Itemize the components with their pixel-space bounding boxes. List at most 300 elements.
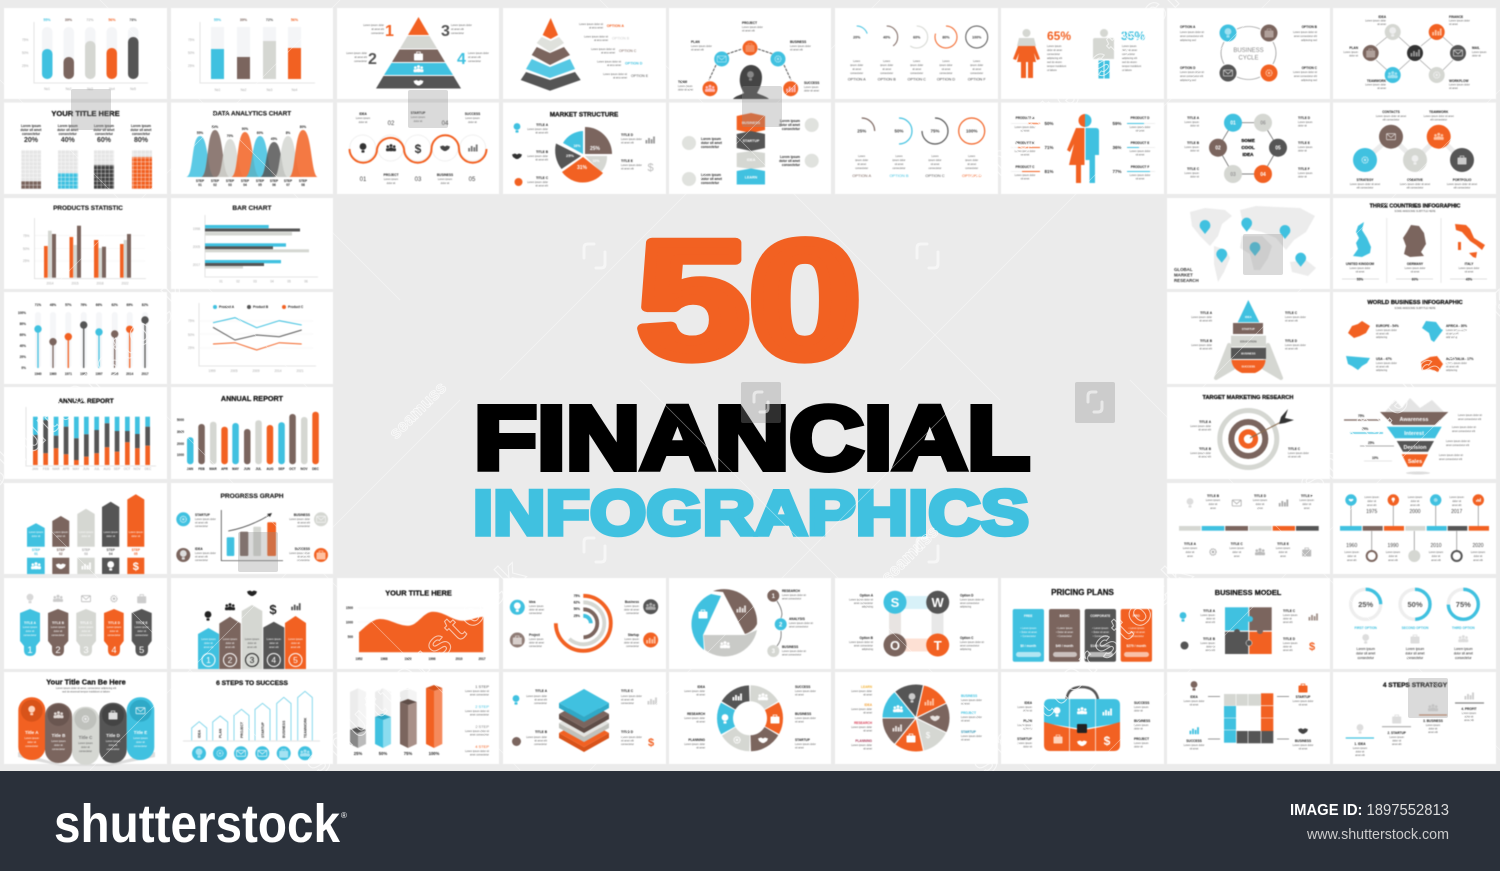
panel: data analytics bell chart: 07 — [286, 183, 290, 187]
panel: flat pyramid: consectetur — [468, 60, 481, 63]
panel: world business — [1333, 292, 1496, 384]
panel: infinity loop circles: Lorem ipsum dolor — [1449, 20, 1470, 22]
panel: 3D pyramid with options: OPTION E — [631, 74, 649, 78]
panel: six steps to success: IDEA — [198, 729, 202, 738]
panel: column cards: consectetur — [107, 748, 120, 751]
panel: year timeline: dolor sit — [1411, 500, 1420, 503]
panel: business model puzzle: amet elit — [1283, 621, 1293, 624]
panel: radial progress options: OPTION A — [852, 173, 871, 178]
panel: lollipop chart — [4, 292, 167, 384]
footer registered mark: ® — [341, 811, 347, 820]
panel: swirl three segment cycle: 3 — [772, 649, 776, 655]
panel: gender split figure: PRODUCT F — [1131, 165, 1149, 169]
panel: rocket: sit amet elit — [1199, 320, 1212, 322]
panel: 3D pyramid with options: OPTION D — [625, 62, 643, 66]
panel: gender split figure: PRODUCT C — [1016, 165, 1035, 169]
panel: swirl three segment cycle: Lorem ipsum dolor sit — [782, 594, 806, 597]
panel: progress graph — [171, 483, 333, 574]
panel: horizontal timeline with icons: Lorem ipsum — [1229, 547, 1244, 550]
panel: numbered tags: dolor sit — [82, 630, 91, 633]
panel: numbered arrow columns: 3 — [250, 655, 255, 665]
panel: ring percentages: 25% — [1358, 600, 1374, 609]
panel: products statistic: 2014 — [46, 282, 54, 286]
panel: 3D pyramid with options: at arcu amet — [607, 64, 621, 67]
panel: 3D pyramid with options: Lorem ipsum dolor sit — [591, 48, 615, 51]
panel: segmented ring: sit amet — [795, 746, 804, 750]
panel: briefcase: dolor sit — [1023, 746, 1032, 748]
panel: column cards: Your Title Can Be Here — [46, 678, 126, 686]
panel: linked icon circles: PORTFOLIO — [1453, 178, 1472, 182]
panel: hexagon idea cycle: TITLE A — [1187, 116, 1200, 120]
panel: flat pyramid: consectetur — [371, 32, 384, 35]
panel: market structure pie: TITLE A — [536, 123, 549, 127]
panel: year timeline: dolor sit — [1474, 555, 1483, 558]
panel: data analytics bell chart: 08 — [301, 183, 305, 187]
panel: pricing plans: • Dolor sit amet — [1092, 631, 1109, 634]
panel: four steps strategy — [1333, 672, 1496, 764]
panel: horizontal timeline with icons: TITLE D — [1254, 494, 1267, 498]
panel: progress graph: IDEA — [195, 547, 203, 551]
panel: 3D column chart: Lorem ipsum dolor sit — [465, 730, 489, 733]
panel: segmented ring — [669, 672, 831, 764]
panel: head with idea arc: Lorem ipsum dolor — [790, 45, 811, 48]
panel: business cycle: Lorem ipsum dolor sit — [1180, 71, 1204, 74]
panel: linked icon circles: Lorem ipsum dolor sit amet — [1376, 115, 1406, 118]
panel: flat pyramid: Lorem ipsum dolor — [363, 24, 384, 27]
panel: six steps to success: PLAN — [218, 728, 222, 738]
panel: puzzle ring — [1167, 672, 1330, 764]
panel: annual report rounded bars: SEP — [278, 467, 286, 471]
panel: stacked layers: consectetur — [621, 702, 634, 705]
panel: ring percentages: SECOND OPTION — [1402, 626, 1429, 630]
panel: progress graph: Lorem ipsum dolor — [289, 552, 310, 555]
panel: year timeline: amet elit — [1347, 559, 1357, 562]
panel: column cards: Title D — [106, 733, 121, 738]
panel: swirl three segment cycle: amet consectetur — [782, 598, 801, 600]
panel: progress graph: STARTUP — [195, 513, 211, 517]
panel: infinity loop circles: Lorem ipsum dolor — [1365, 84, 1386, 86]
panel: wave timeline: BUSINESS — [437, 173, 453, 177]
panel: hexagon idea cycle: 04 — [1260, 172, 1266, 178]
panel: briefcase: dolor sit — [1023, 710, 1032, 712]
panel: horizontal timeline with icons: TITLE C — [1231, 542, 1243, 546]
panel: 3D pyramid with options: OPTION C — [619, 49, 637, 53]
panel: pricing plans: • Consectetur — [1129, 635, 1144, 638]
panel: radial bar chart: Lorem ipsum — [625, 605, 639, 608]
panel: waffle percent chart — [4, 102, 167, 194]
panel: annual report rounded bars: MAY — [232, 467, 240, 471]
panel: business model puzzle: $ — [1309, 641, 1315, 653]
panel: lollipop chart: 1960 — [49, 372, 57, 376]
panel: business cycle: amet consectetur elit — [1294, 75, 1317, 78]
panel: radial progress options: 100% — [966, 128, 977, 134]
panel: segmented ring: Lorem ipsum dolor — [795, 717, 816, 720]
panel: ring percentages: THIRD OPTION — [1452, 626, 1475, 630]
panel: target marketing — [1167, 387, 1330, 479]
panel: column cards: dolor sit — [81, 746, 90, 749]
panel: world business: adipiscing — [1376, 369, 1388, 372]
panel: infinity loop circles: WORKFLOW — [1449, 79, 1468, 83]
panel: segmented ring: BUSINESS — [795, 712, 811, 716]
panel: sales funnel: 75% — [1358, 414, 1365, 418]
panel: business cycle: amet consectetur elit — [1294, 35, 1317, 38]
panel: products statistic: 75% — [23, 234, 30, 238]
panel: progress graph: consectetur — [297, 559, 310, 562]
panel: horizontal timeline with icons: amet — [1234, 555, 1240, 558]
panel: linked icon circles: CONTACTS — [1382, 110, 1400, 114]
panel: segmented ring: sit amet — [696, 694, 705, 696]
panel: segmented ring: Lorem ipsum dolor — [795, 743, 816, 746]
panel: lollipop chart: 69% — [127, 303, 133, 307]
panel: line chart: 2021 — [296, 369, 304, 373]
panel: annual report stacked bars: JUN — [83, 467, 90, 471]
panel: progress arrows: ipsum dolor — [970, 64, 983, 67]
panel: numbered arrow columns: 1 — [206, 655, 211, 665]
panel: seven segment pie: sit amet — [863, 694, 872, 696]
panel: market structure pie: TITLE C — [536, 176, 549, 180]
panel: world business: sit amet elit — [1376, 366, 1389, 368]
panel: puzzle ring: Lorem ipsum dolor — [1184, 744, 1205, 747]
panel: progress arrows: Lorem — [883, 60, 890, 63]
panel: square bar chart: 25% — [188, 64, 195, 68]
panel: briefcase: PROJECT — [1134, 737, 1149, 741]
panel: column cards: Title C — [79, 735, 93, 740]
panel: wave timeline: 05 — [469, 177, 476, 183]
panel: horizontal timeline with icons: amet — [1280, 555, 1286, 558]
panel: world business: Lorem ipsum dolor — [1446, 362, 1467, 365]
panel: square bar chart: 55% — [214, 18, 222, 22]
panel: world business: Lorem ipsum dolor — [1376, 362, 1397, 365]
panel: pricing plans: $279 / month — [1127, 644, 1146, 648]
panel: briefcase: dolor sit — [1134, 746, 1143, 748]
panel: flat pyramid: 1 — [385, 23, 394, 40]
panel: stacked layers — [503, 672, 666, 764]
panel: hexagon idea cycle: dolor sit — [1298, 150, 1307, 152]
panel: radial progress options: consectetur — [855, 167, 868, 170]
panel: step arrows with icons: 01 — [34, 552, 38, 556]
panel: progress graph: consectetur — [195, 525, 208, 528]
panel: radial progress options: sit amet — [895, 163, 904, 166]
panel: infinity loop circles: dolor sit — [1472, 54, 1481, 58]
panel: lollipop chart: 2017 — [141, 372, 149, 376]
panel: products statistic: PRODUCTS STATISTIC — [53, 205, 123, 212]
panel: learning chevron stack: Lorem ipsum — [701, 137, 721, 141]
panel: waffle percent chart: 60% — [97, 137, 112, 144]
panel: puzzle ring: Lorem ipsum dolor — [1184, 700, 1205, 703]
panel: products statistic: 2015 — [71, 282, 79, 286]
panel: data analytics bell chart: STEP — [256, 179, 265, 183]
panel: gender split figure: 77% — [1112, 169, 1122, 174]
panel: radial bar chart: Idea — [529, 600, 536, 604]
panel: business cycle: OPTION A — [1180, 25, 1196, 29]
panel: data analytics bell chart: 01 — [198, 183, 202, 187]
panel: stacked layers: consectetur — [621, 743, 634, 746]
panel: four steps strategy: 2. STARTUP — [1388, 731, 1407, 735]
panel: market structure pie: Lorem ipsum dolor — [621, 164, 642, 167]
panel: rounded bar chart — [4, 8, 167, 99]
panel: annual report rounded bars: APR — [221, 467, 229, 471]
panel: flat pyramid: Lorem ipsum dolor — [451, 24, 472, 27]
panel: progress arrows: ipsum dolor — [850, 64, 863, 67]
panel: area chart: 2017 — [478, 657, 486, 661]
panel: progress arrows: sit amet — [882, 68, 891, 71]
panel: numbered arrow columns: dolor sit — [269, 642, 278, 645]
panel: square bar chart: 72% — [266, 18, 274, 22]
panel: radial bar chart: consectetur — [626, 612, 639, 615]
panel: six steps to success: PROJECT — [240, 721, 244, 738]
panel: waffle percent chart: consectetur — [59, 132, 77, 136]
panel: radial bar chart: Lorem ipsum — [625, 638, 639, 641]
panel: gender split figure: sit amet — [1136, 178, 1145, 180]
panel: business cycle: OPTION B — [1302, 25, 1318, 29]
panel: progress graph: sit amet elit — [297, 556, 310, 558]
panel: lollipop chart: 1986 — [80, 372, 87, 376]
panel: SWOT: Lorem ipsum dolor sit — [960, 641, 984, 644]
panel: radial bar chart: consectetur — [529, 612, 542, 615]
panel: radial bar chart: dolor sit amet — [529, 642, 544, 644]
panel: numbered arrow columns: Lorem ipsum — [267, 638, 281, 641]
panel: world business: AUSTRALIA - 17% — [1446, 357, 1474, 361]
panel: radial progress options: Lorem — [895, 155, 903, 158]
panel: column cards: consectetur — [79, 750, 92, 753]
panel: waffle percent chart: 40% — [61, 137, 75, 144]
panel: lollipop chart: 20% — [20, 355, 26, 359]
panel: data analytics bell chart: 70% — [227, 134, 233, 138]
panel: horizontal timeline with icons: TITLE F — [1301, 494, 1313, 498]
panel: progress graph: PROGRESS GRAPH — [220, 493, 284, 500]
panel: business cycle: CYCLE — [1238, 56, 1259, 62]
panel: numbered tags: Lorem ipsum — [23, 626, 37, 629]
panel: annual report stacked bars: DEC — [145, 467, 152, 471]
panel: year timeline: Lorem ipsum — [1386, 551, 1400, 554]
panel: gender split figure: Lorem ipsum dolor — [1130, 174, 1151, 177]
panel: numbered tags: TITLE E — [136, 621, 148, 625]
panel: numbered arrow columns: Lorem ipsum — [245, 638, 259, 641]
panel: stacked layers: Lorem ipsum dolor — [526, 736, 547, 739]
panel: step arrows with icons: STEP — [82, 548, 91, 552]
panel: horizontal bar chart: 01 — [219, 280, 223, 284]
panel: business cycle: OPTION C — [1302, 66, 1318, 70]
panel: market structure pie: 31% — [577, 165, 588, 171]
panel: data analytics bell chart: 04 — [243, 183, 247, 187]
panel: three countries: Lorem ipsum dolor — [1459, 267, 1480, 270]
panel: briefcase: $ — [1104, 734, 1111, 748]
panel: 3D pyramid with options: at arcu amet — [601, 52, 615, 54]
panel: hexagon idea cycle: TITLE C — [1187, 167, 1200, 171]
panel: gender split figure: 59% — [1112, 121, 1122, 126]
panel: hexagon idea cycle: 03 — [1230, 172, 1236, 178]
panel: ring percentages: dolor sit amet — [1405, 652, 1425, 656]
panel: step arrows with icons: STEP — [57, 548, 66, 552]
panel: stacked layers: Lorem ipsum dolor — [621, 736, 642, 739]
panel: column cards: Title B — [52, 733, 66, 738]
panel: data analytics bell chart: 06 — [272, 183, 276, 187]
panel: three countries: sit amet — [1411, 270, 1420, 274]
panel: flat pyramid: sit amet elit — [468, 56, 481, 59]
panel: swirl three segment cycle: amet consectetur — [789, 626, 808, 628]
panel: business cycle: adipiscing sed — [1180, 79, 1196, 82]
panel: world business: sit amet elit — [1446, 366, 1459, 368]
panel: stacked layers: Lorem ipsum dolor — [621, 695, 642, 698]
panel: 3D pyramid with options: Lorem ipsum dolor sit — [603, 73, 627, 76]
panel: radial progress options: consectetur — [929, 167, 942, 170]
panel: gender split figure — [1001, 102, 1164, 194]
panel: learning chevron stack — [669, 102, 831, 194]
panel: line chart: 1999 — [208, 369, 216, 373]
panel: annual report rounded bars: 5000 — [177, 418, 184, 422]
panel: world business: SOME AWESOME SUBTITLE HERE — [1394, 307, 1436, 310]
panel: numbered tags: 3 — [83, 645, 89, 656]
panel: radial bar chart: dolor sit amet — [529, 608, 544, 612]
panel: SWOT: amet consectetur — [854, 602, 873, 605]
panel: hexagon idea cycle: 01 — [1230, 120, 1236, 126]
panel: horizontal bar chart: 06 — [304, 280, 308, 284]
panel: radial bar chart: dolor sit amet — [624, 608, 639, 612]
panel: progress graph: consectetur — [195, 559, 208, 562]
panel: market structure pie: MARKET STRUCTURE — [550, 112, 619, 118]
panel: SWOT — [835, 578, 998, 669]
panel: gender split figure: 36% — [1112, 145, 1122, 150]
panel: annual report stacked bars: SEP — [114, 467, 120, 471]
panel: progress graph: SUCCESS — [295, 547, 310, 551]
panel: column cards: consectetur — [52, 748, 65, 751]
panel: puzzle ring: sit amet — [1190, 748, 1199, 750]
panel: market structure pie: 10% — [592, 159, 600, 163]
panel: radial progress options: 50% — [894, 128, 904, 134]
panel: pricing plans: • Dolor sit amet — [1128, 631, 1145, 634]
panel: data analytics bell chart: 8% — [286, 131, 290, 135]
panel: 3D pyramid with options: at arcu amet — [594, 39, 608, 42]
panel: gender split figure: sit amet — [1136, 130, 1145, 132]
panel: four steps strategy: Lorem ipsum — [1389, 736, 1404, 739]
panel: numbered arrow columns: amet elit — [247, 646, 257, 649]
panel: business model puzzle: dolor sit — [1206, 646, 1215, 648]
panel: hexagon idea cycle — [1167, 102, 1330, 194]
panel: three countries: 55% — [1357, 278, 1363, 282]
panel: gender split figure: Lorem ipsum dolor — [1015, 126, 1036, 129]
panel: sales funnel: Lorem ipsum dolor sit — [1439, 454, 1463, 457]
panel: rounded bar chart: No2 — [66, 87, 72, 91]
panel: business cycle: adipiscing sed — [1180, 39, 1196, 42]
panel: radial bar chart: 75% — [574, 594, 580, 598]
panel: seven segment pie: sit amet — [961, 738, 970, 742]
panel: gender split figure: Lorem ipsum dolor — [1015, 150, 1036, 153]
panel: hexagon idea cycle: dolor sit — [1190, 150, 1199, 152]
panel: year timeline: 1960 — [1346, 543, 1357, 549]
panel: waffle percent chart: dolor sit amet — [57, 128, 79, 132]
panel: data analytics bell chart: STEP — [299, 179, 308, 183]
panel: learning chevron stack: dolor sit amet — [779, 159, 801, 163]
panel: briefcase: Lorem ipsum — [1018, 706, 1032, 709]
panel: hexagon idea cycle: dolor sit — [1190, 176, 1199, 178]
panel: business cycle: amet consectetur elit — [1180, 35, 1203, 38]
panel: progress arrows: 20% — [853, 36, 861, 40]
panel: segmented ring: Lorem ipsum dolor — [684, 717, 705, 720]
panel: wave timeline: SUCCESS — [465, 112, 480, 116]
panel: 3D pyramid with options: at arcu amet — [589, 26, 603, 30]
panel: horizontal timeline with icons: Lorem ipsum — [1206, 499, 1220, 502]
panel: waffle percent chart: dolor sit amet — [131, 128, 152, 132]
panel: pricing plans: • Lorem ipsum — [1020, 627, 1036, 630]
panel: target marketing: sit amet elit — [1198, 456, 1211, 458]
panel: woman and man percentages: Lorem ipsum — [1122, 45, 1136, 48]
panel: briefcase: dolor sit — [1134, 728, 1143, 730]
panel: infinity loop circles: sit amet — [1449, 23, 1458, 26]
panel: flat pyramid: Lorem ipsum dolor — [468, 52, 489, 55]
panel: four steps strategy: amet elit — [1428, 731, 1438, 734]
panel: learning chevron stack: STARTUP — [743, 139, 760, 143]
website: www.shutterstock.com — [1306, 827, 1449, 843]
panel: business cycle: Lorem ipsum dolor sit — [1293, 31, 1317, 34]
panel: rocket: TITLE D — [1285, 339, 1298, 343]
panel: briefcase: Lorem ipsum — [1018, 742, 1032, 745]
panel: numbered tags: Lorem ipsum — [51, 626, 65, 629]
panel: numbered arrow columns: Lorem ipsum — [201, 638, 216, 641]
panel: three countries — [1333, 198, 1496, 289]
panel: head with idea arc: Lorem ipsum dolor — [691, 45, 712, 48]
panel: pricing plans: $0 / month — [1020, 644, 1036, 648]
panel: lollipop chart: 1997 — [95, 372, 103, 376]
panel: seven segment pie: RESEARCH — [854, 721, 873, 725]
panel: numbered arrow columns: dolor sit — [226, 642, 235, 645]
panel: hexagon idea cycle: dolor sit — [1298, 124, 1307, 128]
panel: three countries: GERMANY — [1407, 262, 1424, 266]
panel: four steps strategy: 4. PROFIT — [1461, 707, 1477, 711]
panel: linked icon circles — [1333, 102, 1496, 194]
panel: radial bar chart: 62% — [574, 600, 580, 604]
panel: four steps strategy: Lorem ipsum — [1353, 747, 1367, 750]
panel: briefcase: Lorem ipsum — [1134, 724, 1148, 727]
panel: area chart: 1000 — [346, 620, 353, 624]
panel: rounded bar chart: No3 — [87, 87, 93, 91]
panel: woman and man percentages: sed do eiusm — [1047, 61, 1062, 64]
panel: rocket: Lorem ipsum dolor — [1285, 344, 1306, 347]
panel: pricing plans: • Lorem ipsum — [1128, 627, 1144, 630]
panel: numbered tags: TITLE B — [52, 621, 65, 625]
panel: lollipop chart: 82% — [142, 303, 148, 307]
panel: stacked layers: sit amet elit — [534, 740, 547, 742]
panel: year timeline: amet elit — [1431, 559, 1441, 562]
panel: market structure pie: sit amet elit — [535, 158, 548, 162]
panel: column cards: dolor sit — [27, 741, 36, 744]
panel: numbered tags: TITLE D — [108, 621, 121, 625]
panel: annual report stacked bars: OCT — [124, 467, 130, 471]
panel: numbered arrow columns: 5 — [293, 655, 298, 665]
panel: puzzle ring: BUSINESS — [1295, 739, 1311, 743]
panel: progress arrows: consectetur — [850, 72, 863, 75]
panel: numbered tags: Lorem ipsum — [107, 626, 121, 629]
panel: year timeline: 2000 — [1409, 509, 1421, 515]
panel: SWOT: Option B — [860, 636, 874, 640]
panel: pricing plans: • Consectetur — [1093, 635, 1108, 638]
panel: seven segment pie — [835, 672, 998, 764]
panel: business cycle: adipiscing sed — [1301, 79, 1318, 82]
panel: radial progress options — [835, 102, 998, 194]
panel: target marketing: TITLE A — [1199, 420, 1212, 424]
panel: lollipop chart: 2014 — [126, 372, 133, 376]
panel: seven segment pie: sit amet — [863, 712, 872, 714]
panel: progress arrows: OPTION D — [937, 78, 955, 82]
panel: year timeline: 2017 — [1451, 509, 1462, 515]
panel: progress graph: consectetur — [297, 525, 310, 528]
panel: radial progress options: OPTION B — [889, 173, 909, 178]
panel: progress arrows: OPTION F — [968, 78, 986, 82]
panel: wave timeline: PROJECT — [383, 173, 399, 177]
panel: data analytics bell chart: STEP — [211, 179, 220, 183]
panel: annual report rounded bars: 1000 — [177, 453, 184, 457]
panel: rounded bar chart: 75% — [22, 38, 29, 42]
panel: lollipop chart: 0% — [21, 366, 26, 370]
